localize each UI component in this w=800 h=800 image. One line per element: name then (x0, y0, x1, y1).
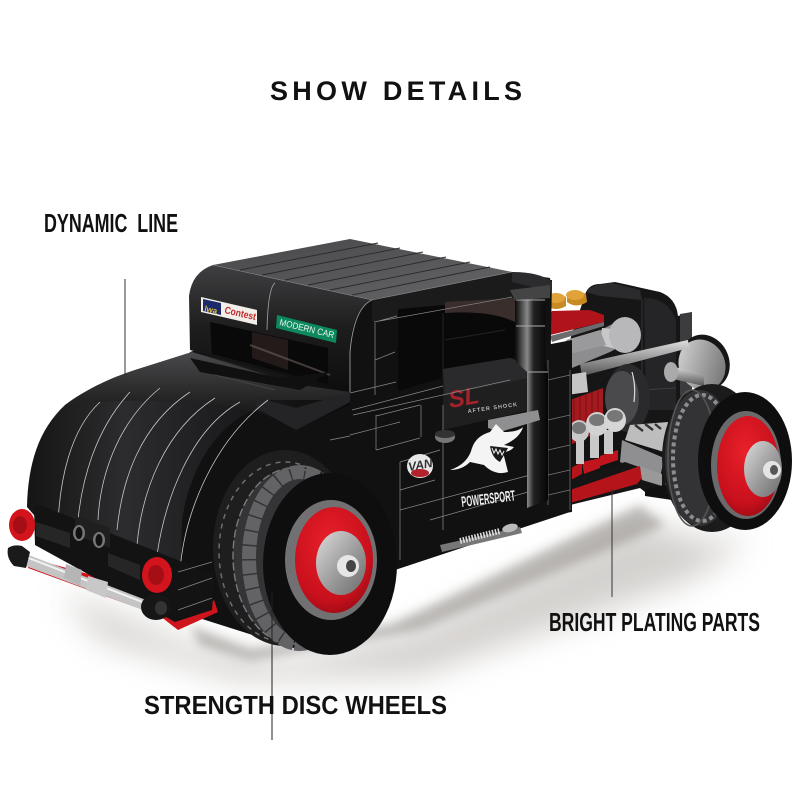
cabin: AFTER SHOCK (467, 402, 519, 415)
door (443, 358, 530, 430)
van badge: VAN (407, 456, 434, 474)
chrome rod (580, 340, 689, 376)
door script: SL (446, 382, 481, 414)
engine bay and grille shell (543, 282, 739, 505)
taillight left (9, 509, 35, 541)
label: strength disc wheels: STRENGTH DISC WHEELS (144, 690, 447, 720)
headlight (671, 326, 739, 398)
frame rail (570, 462, 665, 505)
title: SHOW DETAILS (270, 76, 522, 106)
sticker: Contest: Contest (223, 305, 258, 323)
body base fill (178, 280, 570, 650)
cabin panel lines (330, 297, 535, 560)
exhaust stack (516, 298, 548, 508)
red plate (543, 310, 604, 336)
side exhaust spring (440, 522, 522, 552)
tread (213, 450, 357, 646)
leader line: dynamic line (124, 279, 126, 381)
taillight right (142, 557, 172, 593)
rear wheel (213, 450, 397, 655)
leader line: strength disc wheels (271, 592, 273, 740)
roof (213, 239, 512, 300)
black bumper mounts (34, 505, 215, 622)
rim (285, 500, 377, 620)
front wheel (662, 384, 792, 532)
sticker: Contest (201, 297, 258, 325)
hub cone (316, 531, 366, 595)
bumper end left (8, 545, 30, 568)
label: dynamic line: DYNAMIC LINE (44, 208, 178, 238)
engine chrome (572, 320, 632, 368)
bumper end right (141, 594, 171, 620)
cabin rear shell (189, 265, 372, 392)
sticker: Contest: lwa (204, 304, 219, 316)
rear fender (27, 352, 350, 612)
side window (398, 299, 515, 391)
ground shadow (60, 505, 750, 680)
sticker: modern car: MODERN CAR (279, 317, 336, 340)
orange studs (547, 294, 566, 309)
body front strip (546, 340, 572, 515)
leader line: bright plating parts (611, 489, 613, 597)
powersport label: POWERSPORT (460, 488, 516, 511)
fender ribs (58, 388, 268, 570)
red tail plate (28, 558, 218, 630)
door handle (488, 410, 540, 432)
red engine block (570, 388, 603, 445)
headlight mount (668, 365, 704, 386)
model car (8, 239, 792, 655)
exhaust headers (569, 408, 626, 480)
frame plate (625, 422, 668, 452)
rear bumper (8, 505, 218, 630)
flywheel (606, 364, 650, 432)
sidewall (263, 473, 397, 655)
shark logo (450, 424, 523, 473)
cabin (178, 239, 572, 650)
rear window (210, 322, 328, 384)
chrome bar (23, 554, 146, 610)
